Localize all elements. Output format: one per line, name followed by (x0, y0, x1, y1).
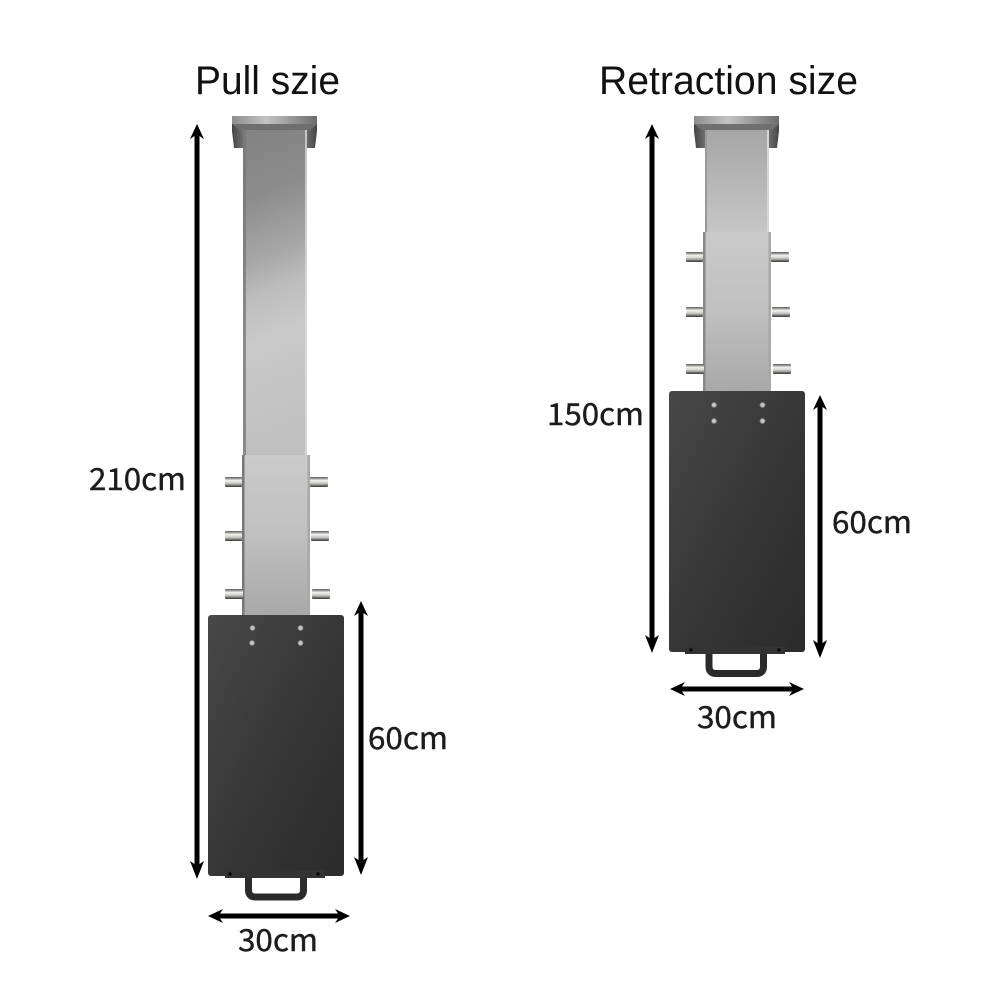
device: extended lift (208, 116, 344, 897)
ceiling bracket (694, 116, 779, 148)
label: 60cm retracted: 60cm (832, 498, 912, 542)
label: 60cm: 60cm (368, 714, 448, 758)
arrow: 60cm panel height retracted (813, 395, 827, 658)
ceiling bracket (232, 116, 317, 148)
upper column (705, 130, 769, 232)
side pins (225, 477, 330, 599)
arrow: 150cm height (645, 124, 659, 653)
lower sleeve (242, 455, 310, 616)
carry handle (709, 651, 764, 674)
black panel (208, 615, 344, 878)
arrow: 60cm panel height (354, 601, 368, 875)
title: retraction size: Retraction size (599, 59, 858, 103)
upper column (243, 130, 307, 455)
label: 30cm retracted: 30cm (697, 693, 777, 737)
black panel (669, 391, 805, 654)
side pins (686, 252, 791, 374)
arrow: 30cm width retracted (670, 682, 804, 696)
arrow: 210cm height (190, 124, 204, 879)
title: pull size: Pull szie (195, 59, 340, 103)
carry handle (248, 875, 304, 897)
label: 210cm: 210cm (89, 455, 186, 499)
label: 30cm: 30cm (238, 916, 318, 960)
device: retracted lift (669, 116, 805, 674)
lower sleeve (703, 232, 771, 392)
arrow: 30cm width (208, 909, 350, 923)
label: 150cm: 150cm (547, 390, 644, 434)
